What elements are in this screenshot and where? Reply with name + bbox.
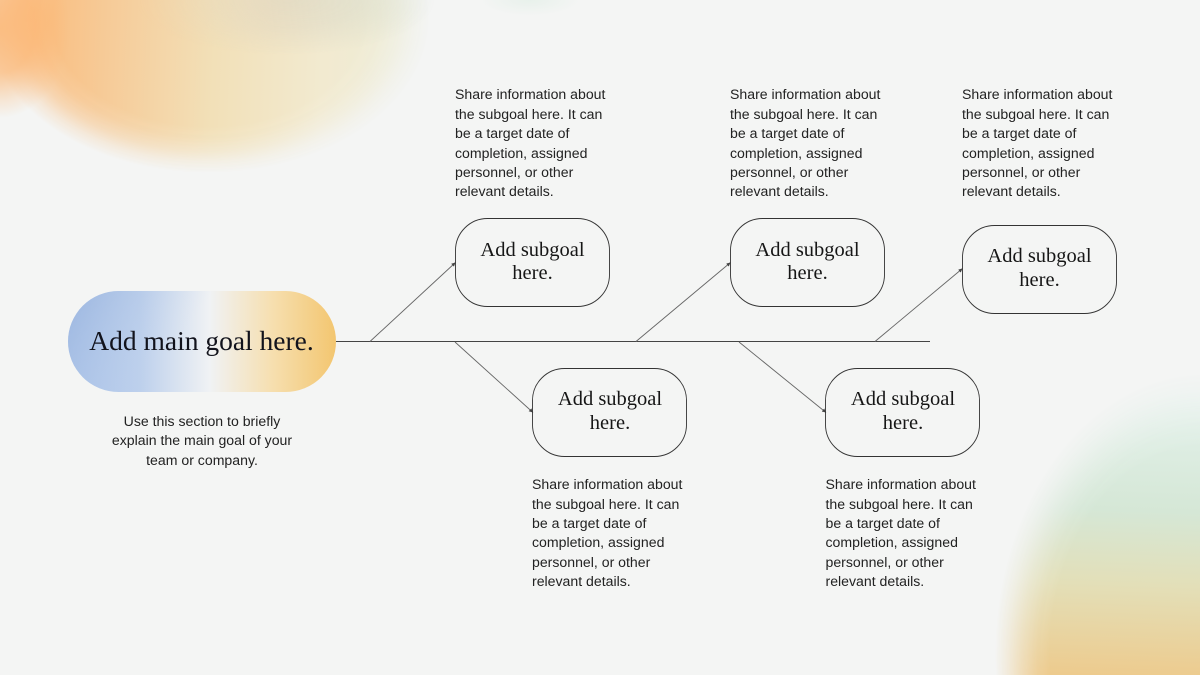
- subgoal 1 details: relevant details.: [455, 183, 554, 199]
- subgoal 5 details: relevant details.: [826, 573, 924, 589]
- subgoal box 5: Add subgoal: [851, 388, 955, 410]
- subgoal 3 details: completion, assigned: [962, 145, 1094, 161]
- subgoal box 1: here.: [512, 262, 553, 284]
- main spine line: [336, 340, 930, 342]
- subgoal 4 details: [532, 476, 683, 589]
- arrow: to subgoal 4: [455, 342, 533, 412]
- subgoal 1 details: completion, assigned: [455, 145, 587, 161]
- subgoal box 4: here.: [590, 412, 630, 434]
- main goal description: team or company.: [146, 452, 258, 468]
- arrow: to subgoal 1: [370, 262, 456, 342]
- subgoal 2 details: relevant details.: [730, 183, 829, 199]
- main goal description: Use this section to briefly: [124, 413, 281, 429]
- subgoal 3 details: Share information about: [962, 86, 1113, 102]
- subgoal 1 details: personnel, or other: [455, 164, 574, 180]
- subgoal box 2: [730, 218, 884, 306]
- arrow: to subgoal 3: [875, 268, 962, 342]
- subgoal 4 details: Share information about: [532, 476, 683, 492]
- subgoal box 5: here.: [883, 412, 923, 434]
- subgoal box 2: here.: [787, 262, 828, 284]
- subgoal 4 details: personnel, or other: [532, 554, 651, 570]
- main goal pill: [68, 291, 336, 392]
- subgoal box 3: [962, 226, 1116, 314]
- subgoal 2 details: completion, assigned: [730, 145, 862, 161]
- subgoal 5 details: be a target date of: [826, 515, 940, 531]
- subgoal box 3: here.: [1019, 269, 1060, 291]
- decorative blob: top left: [0, 0, 422, 168]
- subgoal box 1: [456, 218, 610, 306]
- subgoal 5 details: Share information about: [826, 476, 976, 492]
- subgoal box 3: Add subgoal: [987, 245, 1092, 267]
- arrow: to subgoal 2: [636, 262, 730, 342]
- subgoal 5 details: personnel, or other: [826, 554, 944, 570]
- subgoal 5 details: completion, assigned: [826, 534, 958, 550]
- subgoal box 2: Add subgoal: [755, 239, 860, 261]
- subgoal 3 details: [962, 86, 1113, 199]
- subgoal 1 details: [455, 86, 606, 199]
- subgoal 1 details: the subgoal here. It can: [455, 106, 602, 122]
- subgoal 5 details: [826, 476, 976, 589]
- subgoal 4 details: completion, assigned: [532, 534, 664, 550]
- subgoal 3 details: personnel, or other: [962, 164, 1081, 180]
- subgoal 2 details: [730, 86, 881, 199]
- subgoal 5 details: the subgoal here. It can: [826, 496, 973, 512]
- subgoal box 1: Add subgoal: [480, 239, 585, 261]
- subgoal 1 details: be a target date of: [455, 125, 569, 141]
- subgoal 4 details: be a target date of: [532, 515, 646, 531]
- subgoal 4 details: relevant details.: [532, 573, 631, 589]
- subgoal 2 details: be a target date of: [730, 125, 844, 141]
- subgoal box 4: [532, 368, 686, 456]
- subgoal 1 details: Share information about: [455, 86, 606, 102]
- main goal description: explain the main goal of your: [112, 432, 292, 448]
- subgoal 3 details: be a target date of: [962, 125, 1076, 141]
- decorative blob: bottom right: [999, 402, 1200, 675]
- subgoal 4 details: the subgoal here. It can: [532, 496, 679, 512]
- arrow: to subgoal 5: [739, 342, 826, 412]
- decorative blob: top centre faint: [470, 0, 590, 25]
- subgoal 3 details: the subgoal here. It can: [962, 106, 1109, 122]
- main goal pill: Add main goal here.: [89, 325, 314, 356]
- main goal description: [112, 413, 292, 468]
- subgoal 2 details: the subgoal here. It can: [730, 106, 877, 122]
- subgoal 2 details: personnel, or other: [730, 164, 849, 180]
- subgoal 2 details: Share information about: [730, 86, 881, 102]
- subgoal 3 details: relevant details.: [962, 183, 1061, 199]
- subgoal box 4: Add subgoal: [558, 388, 662, 410]
- subgoal box 5: [826, 368, 980, 456]
